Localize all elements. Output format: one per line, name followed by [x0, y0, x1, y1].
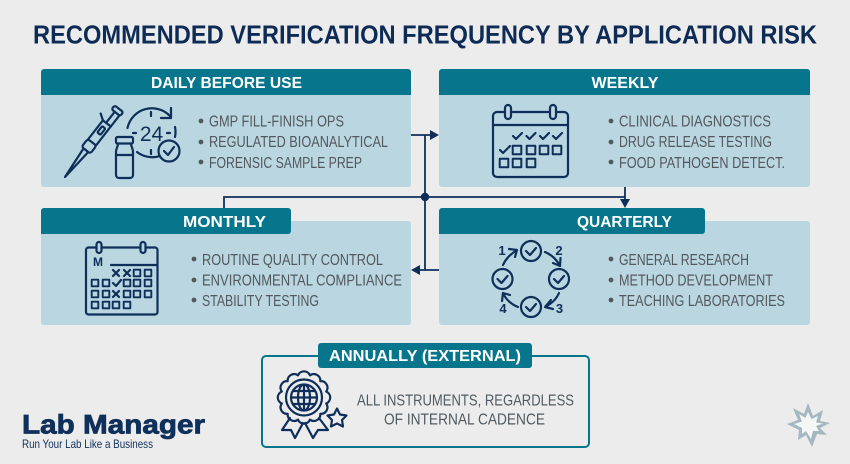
icon: 24-hour clock with check — [128, 108, 180, 162]
header: quarterly — [439, 208, 705, 234]
header: annually (external) — [318, 343, 532, 368]
list: monthly uses: STABILITY TESTING — [202, 293, 319, 310]
header: monthly — [41, 208, 291, 234]
icon: vial — [116, 137, 133, 178]
list: weekly uses: DRUG RELEASE TESTING — [619, 134, 772, 151]
header: monthly: MONTHLY — [183, 214, 266, 231]
list: monthly uses: ROUTINE QUALITY CONTROL — [202, 252, 383, 269]
list: quarterly uses — [609, 252, 785, 310]
icon: monthly calendar — [86, 242, 158, 314]
panel: daily before use — [41, 69, 411, 187]
list: daily uses — [199, 114, 388, 172]
list: weekly uses: CLINICAL DIAGNOSTICS — [619, 114, 771, 130]
icon label: 24: 24 — [140, 123, 163, 146]
icon label: M: M — [93, 255, 103, 269]
list: quarterly uses: METHOD DEVELOPMENT — [619, 272, 773, 290]
icon: quarterly cycle of checks — [492, 241, 569, 317]
header: daily before use — [41, 69, 411, 95]
icon numbers 1 to 4: 4 — [499, 301, 507, 316]
logo: Lab Manager: Run Your Lab Like a Business — [22, 437, 153, 451]
panel: monthly — [41, 208, 411, 325]
list: quarterly uses: GENERAL RESEARCH — [619, 252, 749, 269]
icon numbers 1 to 4: 3 — [556, 301, 563, 316]
logo: Lab Manager: Lab Manager — [22, 410, 206, 440]
list: monthly uses: ENVIRONMENTAL COMPLIANCE — [202, 272, 402, 290]
header: weekly — [439, 69, 810, 95]
panel: quarterly — [439, 208, 810, 325]
annual description text: OF INTERNAL CADENCE — [384, 412, 545, 428]
list: monthly uses — [192, 252, 402, 310]
icon numbers 1 to 4: 2 — [555, 243, 563, 258]
list: weekly uses — [609, 114, 785, 172]
list: daily uses: REGULATED BIOANALYTICAL — [209, 134, 388, 151]
icon: globe award ribbon with star — [278, 371, 346, 438]
header: daily before use: DAILY BEFORE USE — [151, 75, 302, 92]
icon: watermark star — [787, 403, 830, 447]
icon numbers 1 to 4 — [498, 243, 563, 316]
logo: Lab Manager — [22, 410, 206, 451]
panel: weekly — [439, 69, 810, 187]
connector arrows — [224, 130, 630, 275]
header: annually (external): ANNUALLY (EXTERNAL) — [329, 348, 521, 365]
list: quarterly uses: TEACHING LABORATORIES — [619, 293, 785, 310]
header: quarterly: QUARTERLY — [577, 214, 672, 231]
icon numbers 1 to 4: 1 — [498, 243, 506, 258]
panel: annually (external) — [262, 343, 589, 447]
list: weekly uses: FOOD PATHOGEN DETECT. — [619, 155, 785, 172]
icon: weekly calendar with checks — [493, 105, 568, 177]
annual description text — [357, 392, 574, 428]
header: weekly: WEEKLY — [592, 75, 659, 92]
icon: pipette — [56, 102, 123, 181]
annual description text: ALL INSTRUMENTS, REGARDLESS — [357, 392, 574, 410]
list: daily uses: FORENSIC SAMPLE PREP — [209, 155, 362, 172]
list: daily uses: GMP FILL-FINISH OPS — [209, 114, 344, 130]
